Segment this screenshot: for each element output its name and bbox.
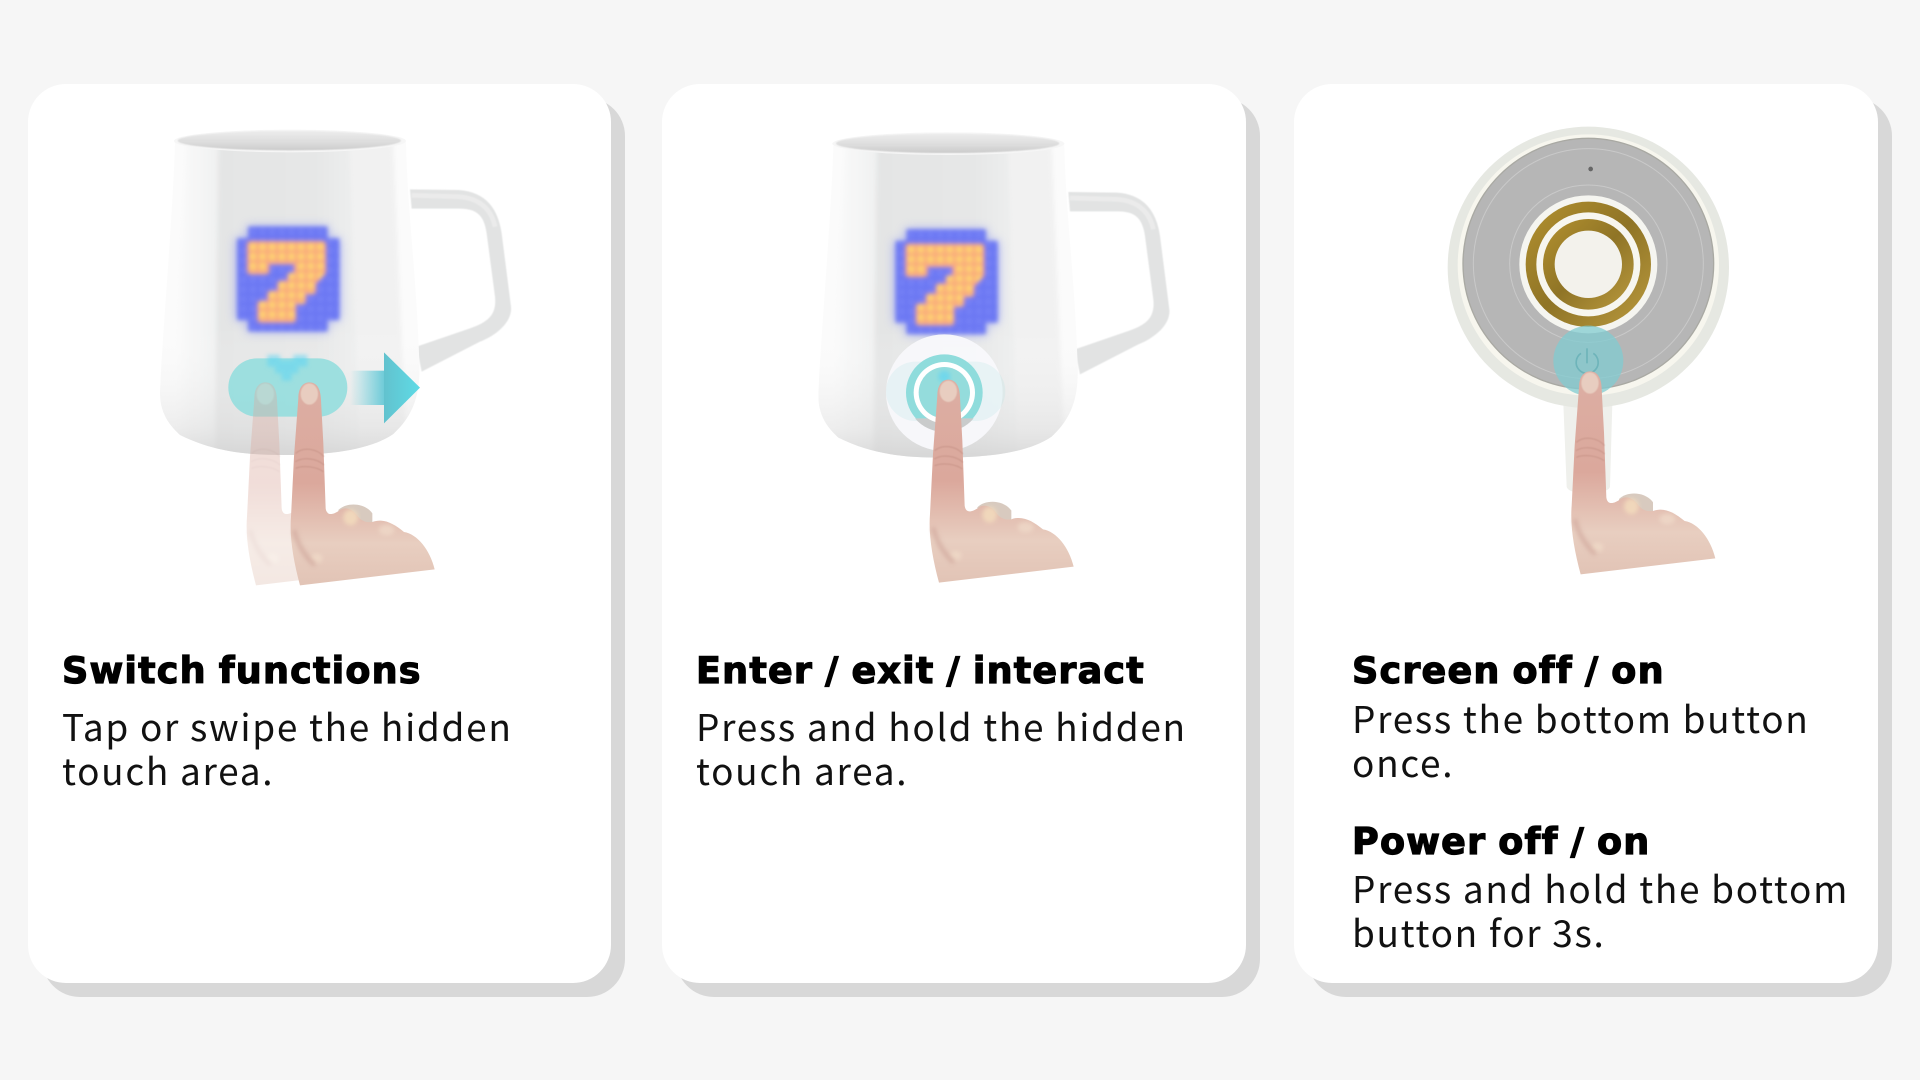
press ripple [886,334,1005,451]
description: button for 3s. [1352,904,1605,958]
card [662,84,1246,983]
description: Press the bottom button [1352,690,1810,744]
illustration: mug with swipe gesture [157,127,511,585]
panel: screen and power [1294,84,1892,997]
description: Press and hold the hidden [696,698,1187,752]
description: once. [1352,734,1454,788]
panel: switch functions [28,84,625,997]
card [28,84,611,983]
mug handle [1563,403,1612,494]
heading: Enter / exit / interact [696,649,1145,692]
hand [1571,371,1715,574]
card shadow [1308,98,1892,997]
arrow [350,352,420,423]
touch area [228,358,347,417]
description: Tap or swipe the hidden [62,698,513,752]
touch highlight [1553,326,1623,396]
hand [930,380,1074,583]
heart pixels [267,355,307,381]
base disc [1448,127,1729,408]
heading: Power off / on [1352,820,1650,863]
panel: enter exit interact [662,84,1260,997]
card shadow [676,98,1260,997]
heading: Switch functions [62,649,422,692]
ghost finger [247,382,391,585]
illustration: mug base with power button [1448,127,1729,574]
description: touch area. [696,742,908,796]
card shadow [42,98,625,997]
illustration: mug with press gesture [815,129,1169,583]
heading: Screen off / on [1352,649,1665,692]
icon: power [1576,348,1598,373]
description: Press and hold the bottom [1352,860,1849,914]
description: touch area. [62,742,274,796]
hand [291,382,435,585]
card [1294,84,1878,983]
